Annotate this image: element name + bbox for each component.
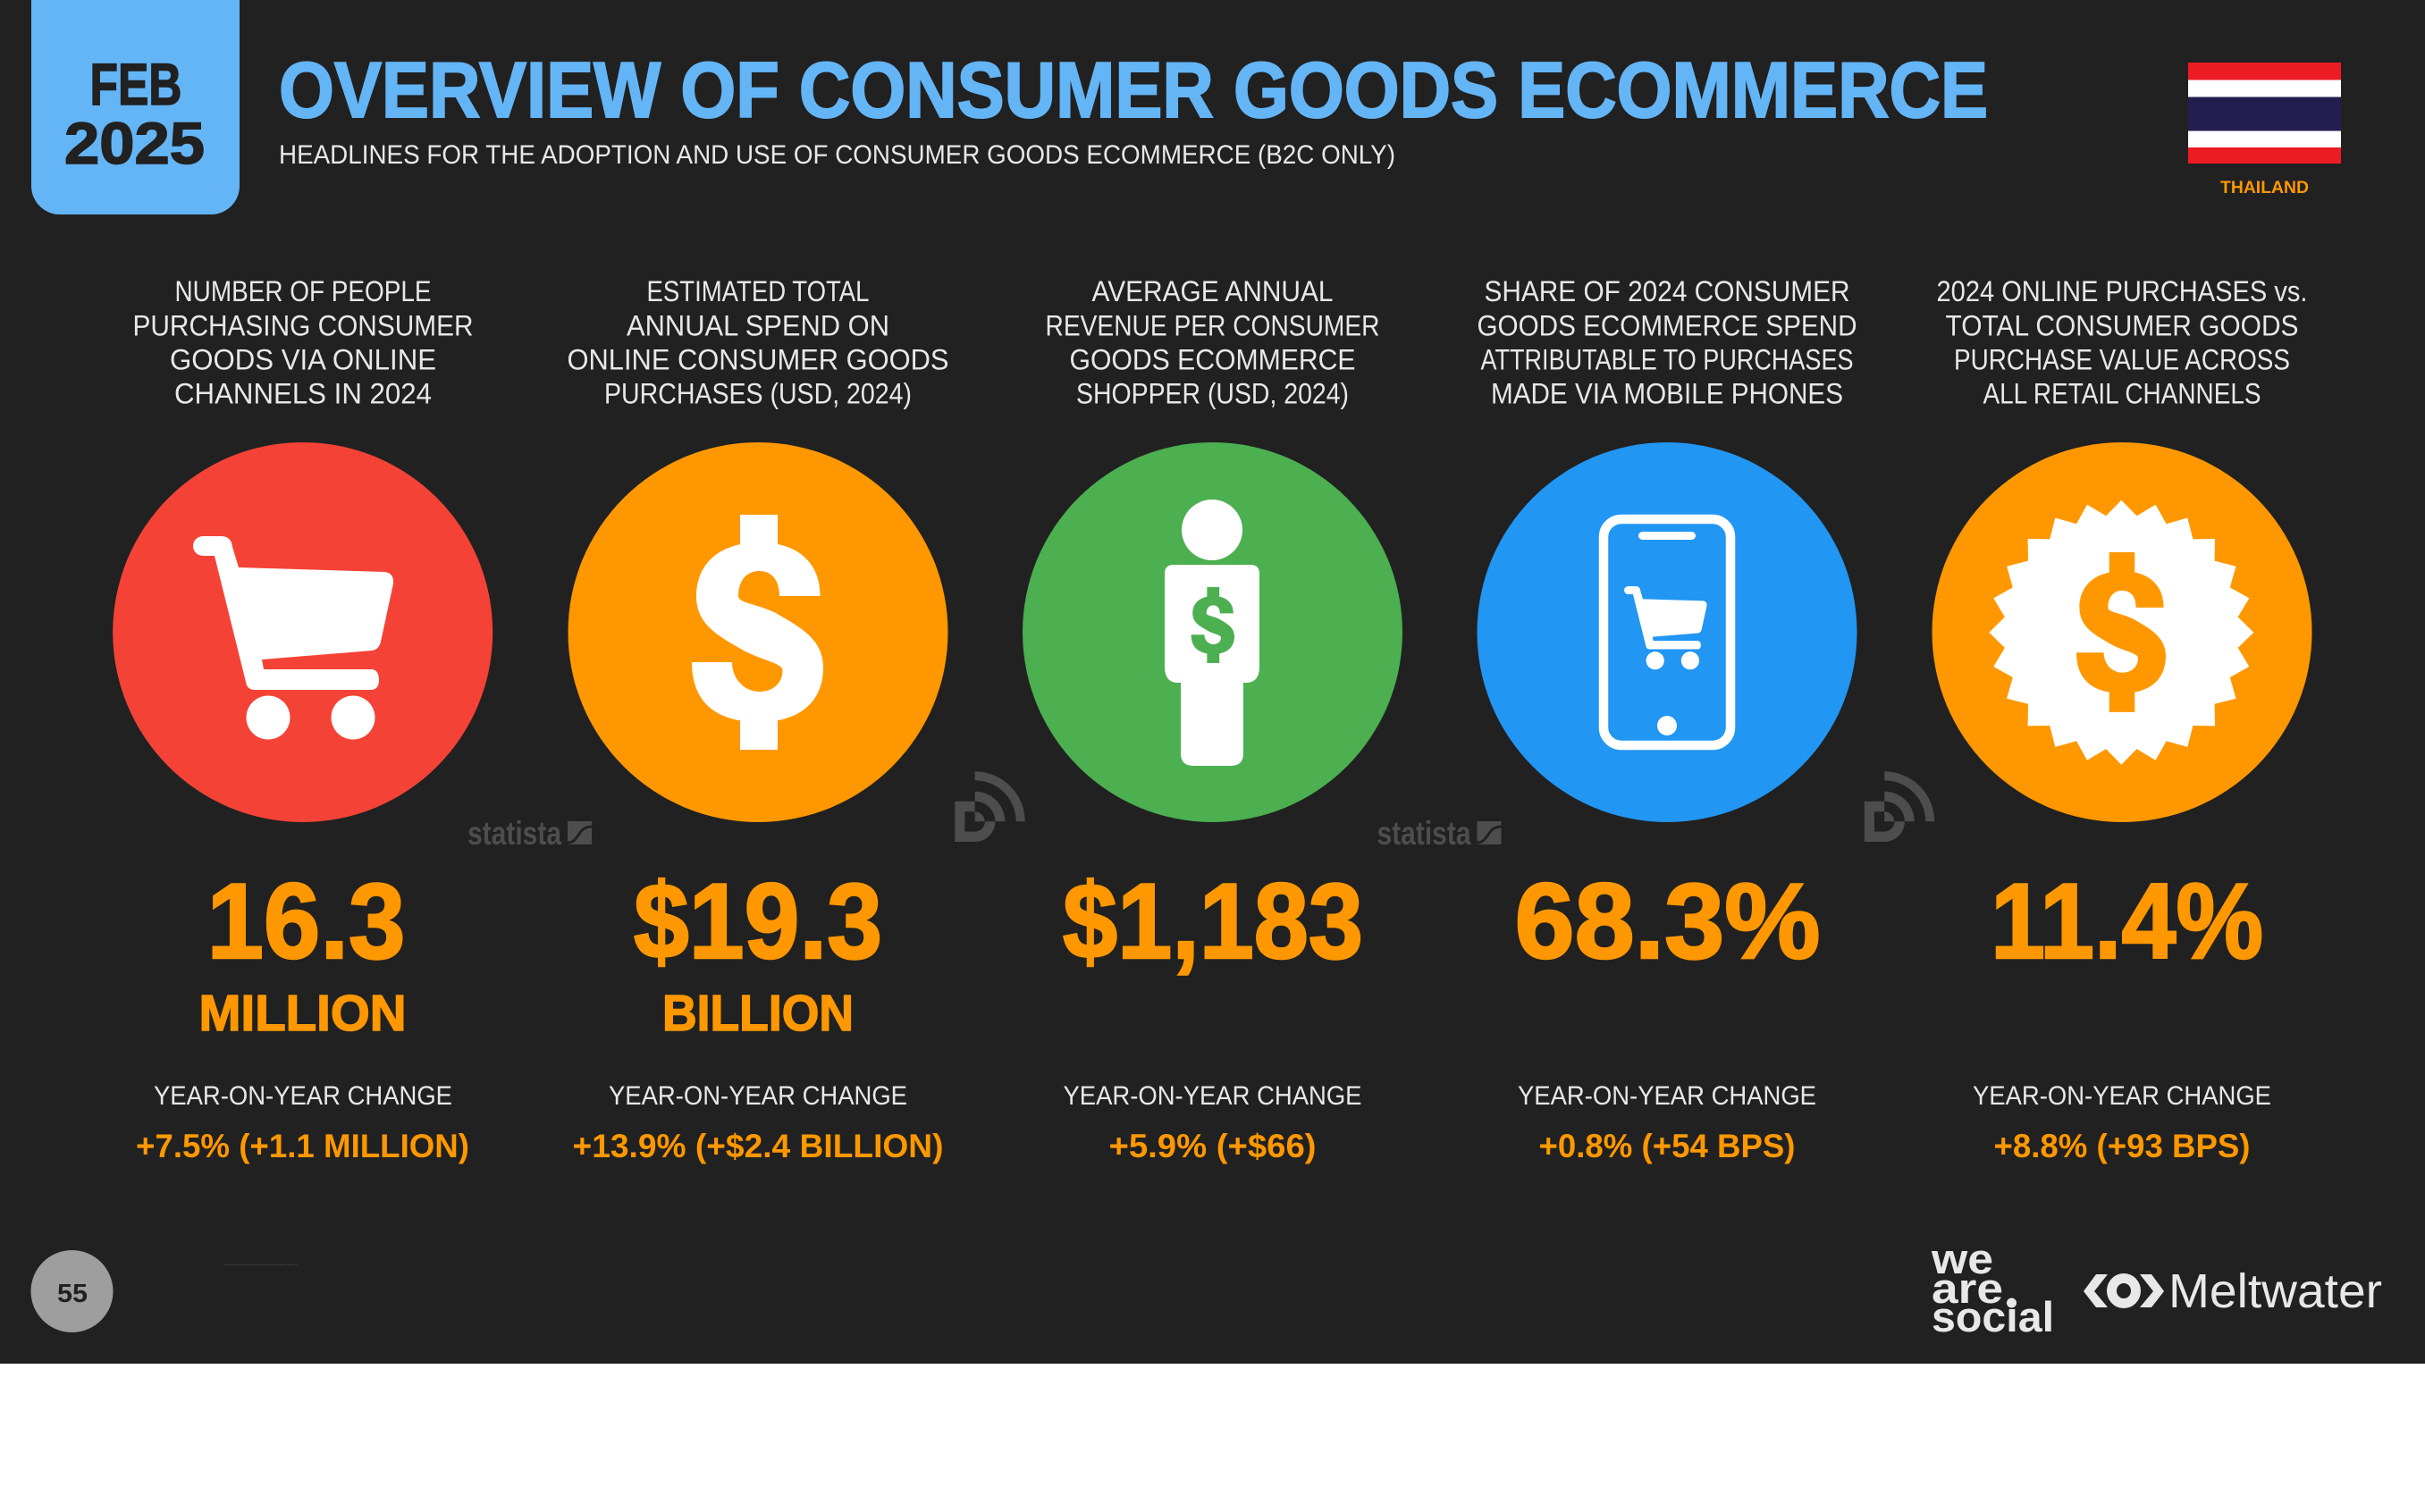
year-on-year label: YEAR-ON-YEAR CHANGE	[1064, 1081, 1362, 1111]
column 4 heading: SHARE OF 2024 CONSUMER	[1484, 275, 1850, 307]
column 1 heading: NUMBER OF PEOPLE	[175, 275, 431, 307]
column 5 heading: TOTAL CONSUMER GOODS	[1945, 309, 2299, 341]
column 3 heading: SHOPPER (USD, 2024)	[1076, 377, 1349, 409]
watermark: statista 2: statista	[1377, 815, 1471, 852]
column 3 heading: AVERAGE ANNUAL	[1092, 275, 1334, 307]
year-on-year value: +7.5% (+1.1 MILLION)	[136, 1128, 469, 1164]
panel: total annual spend	[567, 275, 949, 1164]
column 4 heading: ATTRIBUTABLE TO PURCHASES	[1480, 343, 1854, 375]
column 5 heading	[1936, 275, 2308, 409]
date tab: FEB	[89, 51, 182, 117]
column 5 heading: PURCHASE VALUE ACROSS	[1954, 343, 2290, 375]
logo: we are social	[1931, 1235, 2054, 1340]
value: 16.3	[207, 861, 406, 981]
column 3 heading: GOODS ECOMMERCE	[1069, 343, 1355, 375]
column 1 heading: CHANNELS IN 2024	[174, 377, 432, 409]
year-on-year label: YEAR-ON-YEAR CHANGE	[609, 1081, 907, 1111]
date tab	[31, 0, 240, 214]
column 4 heading: MADE VIA MOBILE PHONES	[1491, 377, 1843, 409]
watermark: signal logo 2	[1865, 771, 1934, 842]
column 2 heading: PURCHASES (USD, 2024)	[604, 377, 912, 409]
icon: Thailand flag	[2188, 63, 2341, 164]
column 2 heading: ESTIMATED TOTAL	[647, 275, 869, 307]
column 4 heading: GOODS ECOMMERCE SPEND	[1477, 309, 1857, 341]
logo: we are social: we	[1931, 1235, 1993, 1282]
country label: THAILAND	[2220, 178, 2309, 197]
panel: people purchasing online	[113, 275, 493, 1164]
logo: we are social: are	[1932, 1264, 2003, 1312]
column 3 heading	[1046, 275, 1380, 409]
panel: online share of retail	[1932, 275, 2311, 1164]
year-on-year value: +8.8% (+93 BPS)	[1993, 1128, 2251, 1164]
logo: we are social: social	[1932, 1293, 2054, 1340]
icon: phone with cart	[1477, 442, 1857, 822]
column 2 heading: ONLINE CONSUMER GOODS	[567, 343, 949, 375]
watermark: statista 1: statista	[467, 815, 561, 852]
panel: revenue per shopper	[1023, 275, 1402, 1164]
value: 68.3%	[1514, 861, 1820, 981]
icon: person with dollar	[1023, 442, 1402, 822]
column 3 heading: REVENUE PER CONSUMER	[1046, 309, 1380, 341]
value: $1,183	[1063, 861, 1363, 981]
value: $19.3	[634, 861, 882, 981]
column 2 heading: ANNUAL SPEND ON	[627, 309, 889, 341]
panel: mobile share of spend	[1477, 275, 1857, 1164]
column 1 heading: PURCHASING CONSUMER	[132, 309, 474, 341]
date tab: 2025	[64, 110, 205, 176]
year-on-year value: +13.9% (+$2.4 BILLION)	[572, 1128, 944, 1164]
column 4 heading	[1477, 275, 1857, 409]
year-on-year value: +5.9% (+$66)	[1108, 1128, 1316, 1164]
column 5 heading: 2024 ONLINE PURCHASES vs.	[1936, 275, 2308, 307]
year-on-year label: YEAR-ON-YEAR CHANGE	[1973, 1081, 2271, 1111]
year-on-year label: YEAR-ON-YEAR CHANGE	[1518, 1081, 1816, 1111]
year-on-year value: +0.8% (+54 BPS)	[1539, 1128, 1795, 1164]
column 2 heading	[567, 275, 949, 409]
value: 11.4%	[1991, 861, 2263, 981]
unit: BILLION	[662, 985, 854, 1042]
page number	[30, 1250, 113, 1332]
column 5 heading: ALL RETAIL CHANNELS	[1983, 377, 2261, 409]
subtitle: HEADLINES FOR THE ADOPTION AND USE OF CONSUMER GOODS ECOMMERCE (B2C ONLY)	[279, 140, 1395, 170]
unit: MILLION	[198, 985, 406, 1042]
watermark: signal logo 1	[955, 771, 1025, 842]
icon: dollar sign	[568, 442, 947, 822]
icon: shopping cart	[113, 442, 493, 822]
icon: dollar starburst	[1932, 442, 2311, 822]
year-on-year label: YEAR-ON-YEAR CHANGE	[154, 1081, 452, 1111]
logo: Meltwater: Meltwater	[2168, 1264, 2382, 1318]
page number: 55	[57, 1280, 88, 1308]
column 1 heading	[132, 275, 474, 409]
title: OVERVIEW OF CONSUMER GOODS ECOMMERCE	[279, 46, 1988, 134]
column 1 heading: GOODS VIA ONLINE	[170, 343, 436, 375]
